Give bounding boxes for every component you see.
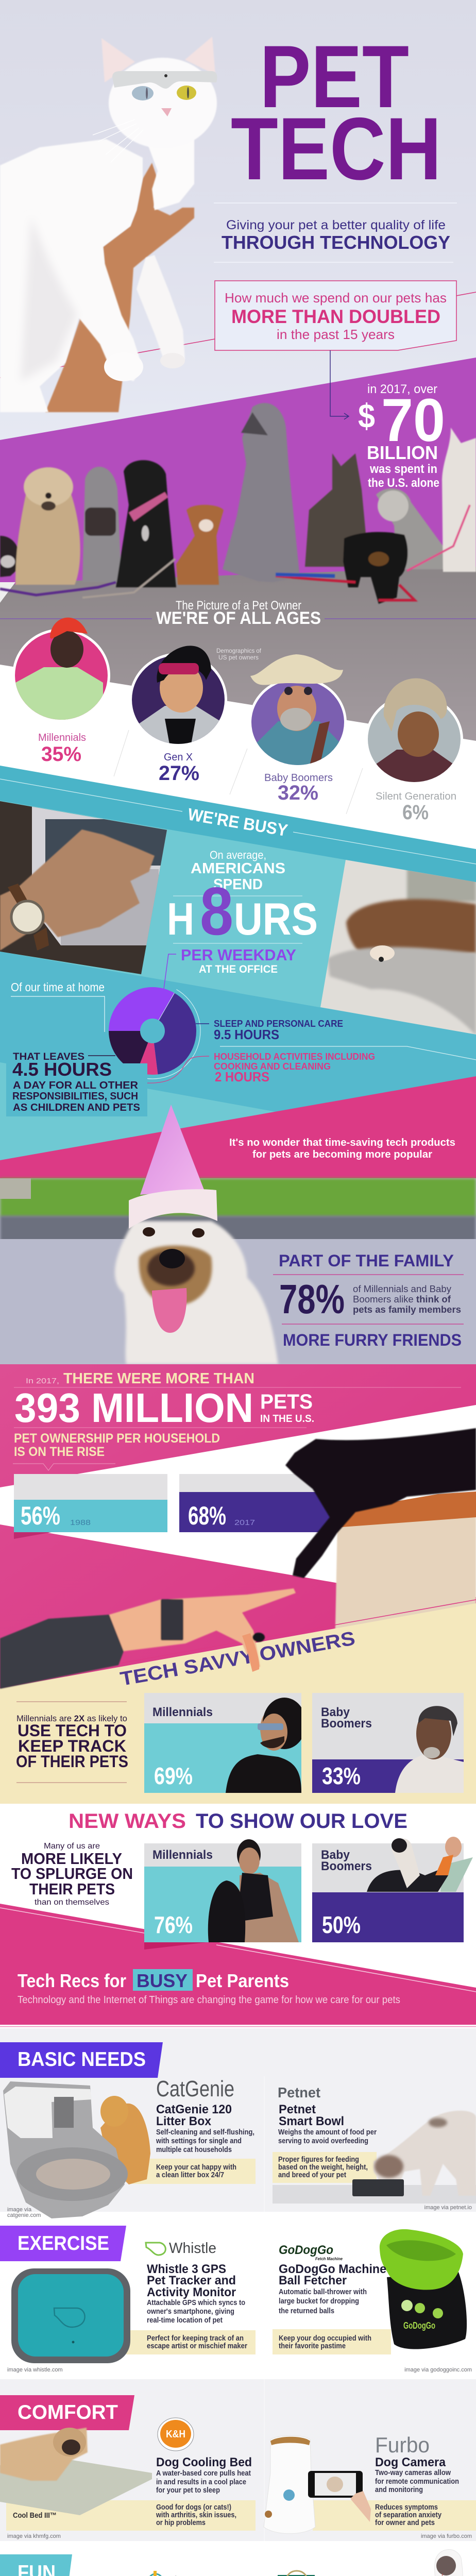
card: baby boomers 33% <box>312 1693 464 1793</box>
heading: tech recs for busy pet parents <box>18 1969 400 2006</box>
statistic: seventy billion dollars: 70 <box>381 386 445 454</box>
logo: catgenie: CatGenie <box>156 2076 234 2102</box>
cat whiskers <box>93 120 143 162</box>
dog: brindle shepherd <box>305 453 369 567</box>
product text: furbo: image via furbo.com <box>421 2533 472 2539</box>
dog: grey curly <box>82 467 122 582</box>
callout: spending doubled: How much we spend on our pets has <box>225 290 447 306</box>
label: gen x 27% <box>159 752 199 785</box>
heading: we're of all ages: WE'RE OF ALL AGES <box>156 608 321 628</box>
dog: white husky <box>442 428 476 572</box>
heading: 393 million pets: 393 MILLION <box>14 1385 253 1431</box>
product text: catgenie: a clean litter box 24/7 <box>156 2171 224 2179</box>
product panel backdrop: petnet <box>273 2152 476 2204</box>
product text: catgenie: catgenie.com <box>7 2212 41 2218</box>
product text: whistle <box>7 2262 247 2373</box>
heading: tech recs for busy pet parents: Tech Recs for <box>18 1970 126 1991</box>
photo: black cat on wall <box>285 1428 476 1578</box>
product text: godoggo: the returned balls <box>279 2307 334 2315</box>
cat head <box>109 58 217 148</box>
product text: catgenie: CatGenie 120 <box>156 2103 232 2116</box>
product text: catgenie: Litter Box <box>156 2114 212 2128</box>
product text: godoggo: GoDogGo <box>279 2243 333 2257</box>
text: use tech <box>16 1702 128 1783</box>
dog: large grey poodle <box>223 403 300 582</box>
legend: sleep and personal care: 9.5 HOURS <box>214 1027 279 1042</box>
label: millennials 35%: Millennials <box>38 732 86 743</box>
product text: cooling bed: for your pet to sleep <box>156 2486 220 2495</box>
product text: cooling bed <box>7 2455 252 2539</box>
bar: 68 percent in 2017: 68% <box>188 1501 226 1530</box>
product text: godoggo: Ball Fetcher <box>279 2274 347 2287</box>
text: splurge on pets: MORE LIKELY <box>21 1850 122 1868</box>
product text: petnet: Weighs the amount of food per <box>278 2128 377 2137</box>
logo: whistle <box>146 2240 216 2257</box>
connector from weekday to pie <box>164 954 176 989</box>
product text: frolicat <box>278 2571 472 2576</box>
label: gen x 27%: Gen X <box>164 752 193 763</box>
product image: whistle tracker <box>11 2268 130 2363</box>
photo: dog background <box>0 1178 476 1364</box>
legend: household activities: HOUSEHOLD ACTIVITIES INCLUDING <box>214 1051 375 1062</box>
product text: petnet: image via petnet.io <box>424 2205 472 2211</box>
connector arrow to statistic <box>330 350 349 419</box>
cat ears <box>101 37 215 82</box>
white demographic panel <box>0 665 476 855</box>
panel: eight hours at the office: URS <box>234 893 318 944</box>
heading: 393 million pets: PET OWNERSHIP PER HOUSEHOLD <box>14 1431 220 1446</box>
dog: black dachshund <box>343 532 408 604</box>
product text: cooling bed: Good for dogs (or cats!) <box>156 2503 231 2512</box>
product text: catgenie <box>7 2103 254 2218</box>
product section bands <box>0 2028 476 2212</box>
product text: furbo <box>375 2433 472 2539</box>
text: splurge on pets: THEIR PETS <box>29 1880 115 1898</box>
cream section background <box>0 1603 476 1804</box>
product text: catgenie: Self-cleaning and self-flushing, <box>156 2128 254 2137</box>
product text: petnet: Petnet <box>279 2103 316 2116</box>
panel: eight hours at the office: PER WEEKDAY <box>181 946 296 964</box>
product text: catgenie: with settings for single and <box>156 2137 242 2145</box>
title: PET <box>260 27 409 126</box>
product image: godoggo ball machine <box>380 2229 467 2349</box>
product image: catgenie litter box with cat <box>3 2081 150 2218</box>
cat chest <box>146 139 194 210</box>
hero background <box>0 0 476 443</box>
party hat brim <box>129 1189 217 1229</box>
statistic: seventy billion dollars: $ <box>358 397 375 435</box>
legend: household activities: COOKING AND CLEANING <box>214 1061 331 1072</box>
label: millennials 35% <box>38 732 86 766</box>
label: silent generation 6% <box>376 791 456 824</box>
product text: whistle: owner's smartphone, giving <box>147 2308 234 2316</box>
product text: furbo: and monitoring <box>375 2486 423 2494</box>
party hat <box>140 1105 204 1195</box>
panel: that leaves 4.5 hours: RESPONSIBILITIES, SUCH <box>12 1091 138 1102</box>
cat eyes <box>132 86 154 100</box>
product text: godoggo: image via godoggoinc.com <box>404 2367 472 2373</box>
subtitle: Giving your pet a better quality of life <box>226 218 446 232</box>
product text: whistle: Perfect for keeping track of an <box>147 2334 244 2343</box>
card: baby boomers 33%: Baby <box>321 1705 350 1719</box>
callout: spending doubled <box>215 281 456 350</box>
purple wall panel <box>0 358 476 590</box>
product text: whistle: escape artist or mischief maker <box>147 2342 247 2350</box>
panel: that leaves 4.5 hours: AS CHILDREN AND PETS <box>13 1102 140 1113</box>
statistic: seventy billion dollars <box>358 382 445 490</box>
text: time-saving tech <box>229 1137 455 1160</box>
text: time-saving tech: It's no wonder that time-saving tech products <box>229 1137 455 1148</box>
photo: puppy on blanket <box>319 855 476 1036</box>
white section <box>0 1804 476 1979</box>
product text: godoggo: Fetch Machine <box>315 2257 343 2261</box>
panel: eight hours at the office: 8 <box>200 873 233 949</box>
dog: small brown <box>176 505 224 585</box>
dog: tan wheaten <box>15 481 80 585</box>
bar: 56 percent in 1988: 1988 <box>70 1518 91 1527</box>
legend: sleep and personal care <box>214 1018 343 1042</box>
product text: cooling bed: A water-based core pulls heat <box>156 2469 251 2478</box>
text: splurge on pets: Many of us are <box>44 1842 100 1851</box>
logo: k&h <box>158 2418 194 2451</box>
panel: that leaves 4.5 hours <box>6 1052 147 1116</box>
panel: eight hours at the office: AMERICANS <box>191 860 285 877</box>
product text: furbo: for owner and pets <box>375 2519 435 2527</box>
label: baby boomers 32% <box>264 772 333 804</box>
product text: godoggo <box>279 2243 472 2373</box>
panel: eight hours at the office: AT THE OFFICE <box>199 963 278 975</box>
product text: furbo: Dog Camera <box>375 2455 446 2469</box>
light teal background <box>0 793 476 1164</box>
heading: we're busy: WE'RE BUSY <box>186 804 289 840</box>
card: millennials 69%: Millennials <box>152 1705 213 1719</box>
text: use tech: Millennials are 2X as likely to <box>16 1714 127 1723</box>
banner: basic needs <box>0 2042 163 2078</box>
crosswalk stripe <box>0 582 15 603</box>
dog: black <box>116 460 176 587</box>
wall and brick <box>334 1492 476 1649</box>
pointing finger over heading <box>242 1633 259 1672</box>
heading: tech recs for busy pet parents: Pet Parents <box>196 1970 289 1991</box>
product text: whistle: Whistle 3 GPS <box>147 2262 226 2276</box>
card: millennials 76% <box>144 1839 301 1950</box>
heading: we're of all ages <box>156 599 321 628</box>
heading: 393 million pets: THERE WERE MORE THAN <box>63 1370 254 1387</box>
product image: furbo dog camera <box>264 2436 371 2534</box>
banner: fun <box>0 2554 72 2576</box>
leashes on ground <box>0 582 116 595</box>
text: splurge on pets: than on themselves <box>35 1898 109 1907</box>
product text: cooling bed: with arthritis, skin issues, <box>156 2511 236 2519</box>
note: demographics: US pet owners <box>218 654 259 661</box>
title <box>231 27 441 198</box>
product text: whistle: Pet Tracker and <box>147 2274 236 2287</box>
product image: pug on cooling bed: Cool Bed III™ <box>13 2512 57 2520</box>
card: baby boomers 33%: Boomers <box>321 1717 372 1731</box>
cat nose <box>161 108 172 116</box>
heading: new ways to show our love: NEW WAYS <box>69 1810 186 1833</box>
portrait: millennial <box>12 618 110 726</box>
card: baby boomers 50%: Baby <box>321 1848 350 1862</box>
product text: godoggo: Keep your dog occupied with <box>279 2334 371 2343</box>
stats: part of the family: 78% <box>279 1276 345 1322</box>
product text: catgenie: multiple cat households <box>156 2146 232 2154</box>
product text: petnet: and breed of your pet <box>278 2171 346 2179</box>
banner: comfort: COMFORT <box>18 2401 118 2424</box>
text: splurge on pets: TO SPLURGE ON <box>11 1865 133 1883</box>
product text: petnet: Proper figures for feeding <box>278 2156 359 2164</box>
label: silent generation 6%: Silent Generation <box>376 791 456 802</box>
product text: petnet: Smart Bowl <box>279 2114 344 2128</box>
panel: eight hours at the office: H <box>167 893 194 944</box>
product text: whistle: Activity Monitor <box>147 2285 236 2299</box>
stats: part of the family: Boomers alike think of <box>353 1294 451 1304</box>
cat front paws <box>104 352 143 381</box>
label: of our time at home <box>11 980 105 1032</box>
heading: new ways to show our love: TO SHOW OUR LOVE <box>196 1810 407 1833</box>
product text: petnet <box>278 2084 472 2211</box>
pink strip <box>0 1076 476 1178</box>
label: baby boomers 32%: 32% <box>278 782 318 804</box>
heading: 393 million pets: IS ON THE RISE <box>14 1445 105 1459</box>
legend: household activities <box>214 1051 375 1084</box>
card: baby boomers 50% <box>312 1837 473 1942</box>
stats: part of the family <box>273 1251 464 1349</box>
portrait: gen x <box>129 646 227 747</box>
product text: cooling bed: Dog Cooling Bed <box>156 2455 252 2469</box>
stats: part of the family: MORE FURRY FRIENDS <box>283 1331 462 1349</box>
statistic: seventy billion dollars: BILLION <box>367 442 438 463</box>
panel: eight hours at the office: SPEND <box>213 876 263 893</box>
arm and hand <box>45 163 194 412</box>
text: splurge on pets <box>11 1842 133 1907</box>
logo: whistle: Whistle <box>169 2240 216 2257</box>
band: we're busy <box>0 766 476 882</box>
heading: tech savvy owners: TECH SAVVY OWNERS <box>118 1628 357 1690</box>
photo: hand on laptop with watch <box>0 793 170 979</box>
banner: basic needs: BASIC NEEDS <box>18 2048 146 2071</box>
product text: catgenie: Keep your cat happy with <box>156 2163 236 2172</box>
pavement <box>0 567 476 773</box>
text: use tech: KEEP TRACK <box>18 1737 126 1755</box>
product image: dog at petnet smart bowl <box>352 2111 476 2196</box>
panel: eight hours at the office <box>167 849 318 975</box>
product text: whistle: real-time location of pet <box>147 2316 223 2325</box>
callout: spending doubled: in the past 15 years <box>277 327 395 342</box>
illustration: white cat held up by a hand <box>0 37 217 412</box>
cream tip box: furbo <box>313 2500 476 2531</box>
label: gen x 27%: 27% <box>159 762 199 785</box>
legend: sleep and personal care: SLEEP AND PERSONAL CARE <box>214 1018 343 1029</box>
statistic: seventy billion dollars: was spent in <box>369 462 437 476</box>
heading: new ways to show our love <box>69 1810 407 1833</box>
product image: godoggo ball machine: GoDogGo <box>403 2320 435 2331</box>
banner: exercise: EXERCISE <box>18 2232 109 2255</box>
photo: dog with party hat <box>115 1105 278 1364</box>
product text: furbo: Furbo <box>375 2433 430 2457</box>
product text: cooling bed: or hip problems <box>156 2519 206 2527</box>
subtitle: THROUGH TECHNOLOGY <box>222 232 450 253</box>
cream tip box: catgenie <box>130 2159 256 2184</box>
card: millennials 76%: 76% <box>154 1911 193 1938</box>
text: use tech: OF THEIR PETS <box>16 1752 128 1771</box>
label: baby boomers 32%: Baby Boomers <box>264 772 333 784</box>
panel: eight hours at the office: On average, <box>210 849 266 861</box>
product text: godoggo: Automatic ball-thrower with <box>279 2288 367 2296</box>
label: of our time at home: Of our time at home <box>11 980 105 994</box>
banner: exercise <box>0 2226 126 2261</box>
product text: godoggo: GoDogGo Machine <box>279 2262 386 2276</box>
product text: cooling bed: in and results in a cool place <box>156 2478 246 2486</box>
stats: part of the family: of Millennials and Baby <box>353 1284 451 1294</box>
pie chart: time at home <box>88 987 209 1083</box>
product text: whistle: image via whistle.com <box>7 2367 63 2373</box>
card: baby boomers 50%: 50% <box>322 1911 361 1938</box>
text: use tech: USE TECH TO <box>18 1721 127 1740</box>
cream tip box: godoggo <box>273 2329 391 2354</box>
label: millennials 35%: 35% <box>41 743 81 766</box>
label: silent generation 6%: 6% <box>402 801 429 824</box>
panel: that leaves 4.5 hours: 4.5 HOURS <box>12 1059 112 1080</box>
smart collar device on forehead <box>112 71 217 89</box>
product text: catgenie: image via <box>7 2207 32 2213</box>
product text: furbo: of separation anxiety <box>375 2511 441 2519</box>
pink tech recs panel <box>0 1904 476 2025</box>
heading: tech recs for busy pet parents: BUSY <box>137 1970 188 1991</box>
arm with sweater pointing at cat <box>0 1588 296 1689</box>
product text: cleverpet <box>7 2571 248 2576</box>
text: time-saving tech: for pets are becoming more popular <box>252 1148 432 1160</box>
cream tip box: k&h <box>6 2500 256 2531</box>
stats: part of the family: pets as family members <box>353 1304 461 1315</box>
title: TECH <box>231 99 441 198</box>
product text: whistle: Attachable GPS which syncs to <box>147 2299 245 2307</box>
product text: cooling bed: image via khmfg.com <box>7 2533 61 2539</box>
product image: pug on cooling bed <box>0 2428 152 2520</box>
statistic: seventy billion dollars: in 2017, over <box>367 382 437 396</box>
product text: godoggo: their favorite pastime <box>279 2342 346 2350</box>
heading: tech recs for busy pet parents: Technology and the Internet of Things are changing the game for how we care for our pets <box>18 1994 400 2006</box>
callout: spending doubled: MORE THAN DOUBLED <box>231 306 440 327</box>
heading: we're of all ages: The Picture of a Pet Owner <box>176 599 301 613</box>
cream tip box: whistle <box>126 2330 256 2354</box>
product text: furbo: Reduces symptoms <box>375 2503 438 2512</box>
note: demographics <box>216 647 262 661</box>
white wedge behind bars <box>0 1405 476 1597</box>
card: baby boomers 50%: Boomers <box>321 1859 372 1873</box>
card: millennials 69% <box>144 1693 306 1793</box>
bar: 68 percent in 2017 <box>179 1474 334 1532</box>
statistic: seventy billion dollars: the U.S. alone <box>368 476 439 490</box>
logo: k&h: K&H <box>166 2429 185 2440</box>
dog: far left <box>0 536 21 577</box>
bar: 56 percent in 1988: 56% <box>21 1501 60 1530</box>
portrait: silent generation <box>365 679 463 785</box>
panel: that leaves 4.5 hours: A DAY FOR ALL OTHER <box>13 1080 139 1091</box>
portrait: baby boomer <box>249 654 347 768</box>
dark teal panel <box>0 952 476 1112</box>
stats: part of the family: PART OF THE FAMILY <box>279 1251 454 1270</box>
heading: 393 million pets <box>13 1370 461 1470</box>
panel: that leaves 4.5 hours: THAT LEAVES <box>13 1052 84 1062</box>
connector line right of callout <box>456 292 476 296</box>
note: demographics: Demographics of <box>216 647 262 654</box>
cat body and hind leg <box>0 139 143 412</box>
card: millennials 76%: Millennials <box>152 1848 213 1862</box>
cat body shading <box>21 216 77 381</box>
bar: 56 percent in 1988 <box>14 1474 167 1539</box>
bar: 68 percent in 2017: 2017 <box>234 1518 255 1527</box>
product text: petnet: based on the weight, height, <box>278 2163 368 2172</box>
banner: comfort <box>0 2395 134 2430</box>
product image: frolicat bolt and kitten <box>380 2550 466 2576</box>
heading: 393 million pets: IN THE U.S. <box>260 1413 314 1425</box>
card: baby boomers 33%: 33% <box>322 1762 361 1789</box>
heading: 393 million pets: PETS <box>260 1391 313 1413</box>
product text: petnet: Petnet <box>278 2084 320 2100</box>
product text: godoggo: large bucket for dropping <box>279 2297 359 2306</box>
photo: row of dogs <box>0 403 476 604</box>
heading: 393 million pets: In 2017, <box>26 1377 59 1385</box>
product text: furbo: Two-way cameras allow <box>375 2469 451 2477</box>
product text: furbo: for remote communication <box>375 2478 459 2486</box>
legend: household activities: 2 HOURS <box>215 1069 269 1084</box>
product text: petnet: serving to avoid overfeeding <box>278 2137 368 2145</box>
card: millennials 69%: 69% <box>154 1762 193 1789</box>
dog: small shaggy grey <box>376 488 447 569</box>
subtitle <box>222 218 450 253</box>
pink section background <box>0 1364 476 1694</box>
connector line behind cat <box>0 339 215 378</box>
cat front leg <box>137 255 185 363</box>
